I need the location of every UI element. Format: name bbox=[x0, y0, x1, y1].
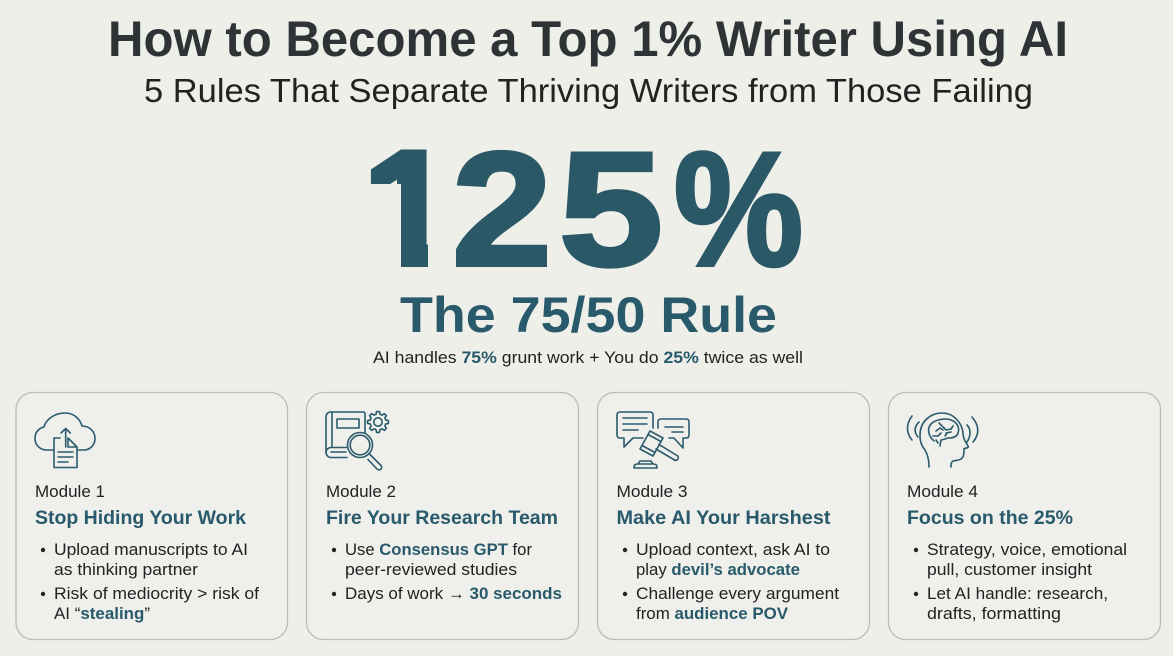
big statistic: 125%: 5 bbox=[559, 119, 663, 300]
module label: Module 4 bbox=[907, 483, 978, 501]
bullet list bbox=[623, 541, 839, 623]
subtitle: 5 Rules That Separate Thriving Writers from Those Failing bbox=[144, 72, 1033, 109]
bullet list: AI “stealing” bbox=[54, 605, 150, 623]
module label: Module 1 bbox=[35, 483, 105, 501]
bullet list: Strategy, voice, emotional bbox=[927, 541, 1127, 559]
module label: Module 3 bbox=[616, 483, 688, 501]
module heading: Stop Hiding Your Work bbox=[35, 507, 246, 529]
icon: debate bubbles and gavel bbox=[617, 412, 689, 468]
panel: module 4 bbox=[888, 392, 1160, 640]
icon: cloud upload document bbox=[35, 413, 95, 468]
title: How to Become a Top 1% Writer Using AI bbox=[108, 11, 1068, 67]
panel: module 3 bbox=[598, 392, 870, 640]
panel: module 1 bbox=[16, 392, 288, 640]
big statistic: 125% bbox=[370, 150, 801, 269]
big statistic: 125%: 1 bbox=[364, 119, 452, 300]
bullet list: as thinking partner bbox=[54, 561, 199, 579]
bullet list: Days of work → 30 seconds bbox=[345, 585, 562, 603]
bullet list: Let AI handle: research, bbox=[927, 585, 1108, 603]
icon: book, magnifier and gear bbox=[326, 412, 388, 470]
bullet list bbox=[914, 541, 1127, 623]
module label: Module 2 bbox=[326, 483, 396, 501]
bullet list: Upload manuscripts to AI bbox=[54, 541, 248, 559]
bullet list: Use Consensus GPT for bbox=[345, 541, 533, 559]
rule heading: The 75/50 Rule bbox=[400, 287, 777, 343]
module heading: Focus on the 25% bbox=[907, 507, 1073, 529]
bullet list: Challenge every argument bbox=[636, 585, 839, 603]
module heading: Make AI Your Harshest bbox=[616, 507, 831, 529]
bullet list bbox=[332, 541, 562, 603]
icon: head with brain and signal waves bbox=[908, 413, 978, 467]
bullet list: drafts, formatting bbox=[927, 605, 1061, 623]
bullet list: play devil’s advocate bbox=[636, 561, 800, 579]
module heading: Fire Your Research Team bbox=[326, 507, 558, 529]
bullet list: pull, customer insight bbox=[927, 561, 1092, 579]
big statistic: 125%: % bbox=[674, 119, 803, 300]
big statistic: 125%: 2 bbox=[452, 119, 552, 300]
bullet list bbox=[41, 541, 259, 623]
rule description: AI handles 75% grunt work + You do 25% twice as well bbox=[373, 349, 803, 367]
bullet list: peer-reviewed studies bbox=[345, 561, 517, 579]
bullet list: from audience POV bbox=[636, 605, 788, 623]
bullet list: Risk of mediocrity > risk of bbox=[54, 585, 259, 603]
bullet list: Upload context, ask AI to bbox=[636, 541, 830, 559]
panel: module 2 bbox=[306, 392, 578, 640]
